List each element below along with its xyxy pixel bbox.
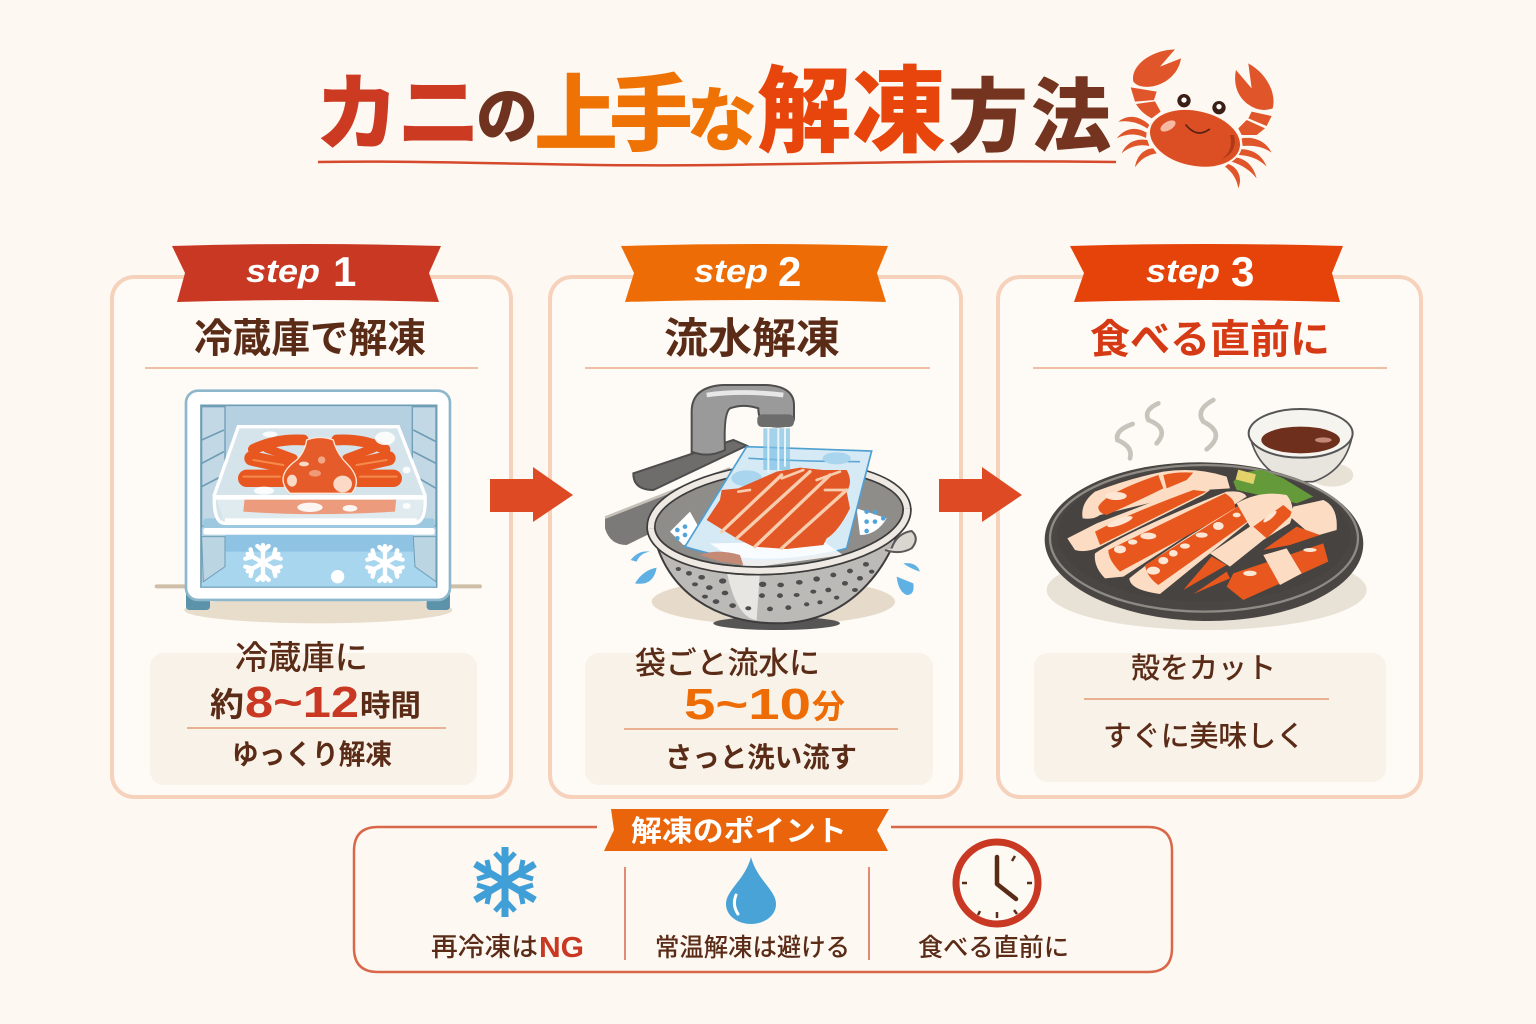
text box: step 1 — [150, 639, 477, 785]
step 1 ribbon: 1 — [333, 248, 356, 295]
step 1 ribbon: step — [246, 253, 320, 289]
heading: step 1: 冷蔵庫で解凍 — [194, 317, 426, 361]
text box: step 1: 時間 — [360, 690, 421, 723]
label: no refreezing: NG — [539, 932, 584, 964]
icon: snowflake — [475, 847, 535, 917]
step 3 ribbon: step — [1146, 253, 1220, 289]
illustration: crab in refrigerator — [157, 391, 480, 623]
panel: step 1 — [112, 244, 511, 797]
title: カニ — [315, 67, 481, 161]
ribbon: points heading — [604, 809, 889, 851]
icon: clock — [956, 842, 1038, 924]
panel: thawing points — [354, 809, 1172, 972]
text box: step 2: 5~10 — [684, 680, 811, 729]
label: no refreezing: 再冷凍は — [431, 932, 538, 962]
title: な — [687, 82, 757, 160]
label: just before eating: 食べる直前に — [918, 934, 1069, 962]
arrow: step 2 to 3 — [939, 467, 1022, 522]
step 3 ribbon: 3 — [1231, 248, 1254, 295]
text box: step 2: さっと洗い流す — [665, 742, 857, 773]
label: no refreezing — [431, 932, 584, 964]
text box: step 2 — [585, 646, 933, 785]
icon: crab mascot — [1117, 49, 1274, 188]
illustration: bag under running water in colander — [605, 385, 920, 630]
title: の — [476, 83, 538, 152]
label: avoid room temperature: 常温解凍は避ける — [655, 934, 850, 962]
text box: step 1: 約 — [210, 686, 244, 723]
illustration: plated crab legs — [1043, 400, 1367, 630]
crab leg pieces — [1067, 470, 1337, 600]
ribbon: points heading: 解凍のポイント — [631, 815, 847, 848]
text box: step 1: 8~12 — [245, 678, 359, 727]
arrow: step 1 to 2 — [490, 467, 573, 522]
text box: step 1: ゆっくり解凍 — [232, 739, 392, 770]
text box: step 2: 分 — [812, 688, 845, 725]
heading: step 2: 流水解凍 — [664, 315, 840, 362]
dipping sauce bowl — [1249, 409, 1353, 482]
text box: step 3: 殻をカット — [1131, 652, 1276, 685]
step 1 ribbon — [172, 244, 441, 302]
step 2 ribbon — [621, 244, 888, 302]
panel: step 3 — [998, 244, 1421, 797]
panel: step 2 — [550, 244, 961, 797]
title: 方法 — [948, 73, 1111, 162]
step 3 ribbon — [1070, 244, 1343, 302]
title: 解凍 — [757, 59, 946, 164]
text box: step 3: すぐに美味しく — [1103, 720, 1305, 753]
text box: step 1: 冷蔵庫に — [235, 639, 368, 676]
title: 上手 — [534, 68, 693, 162]
icon: water drop — [726, 857, 776, 924]
heading: step 3: 食べる直前に — [1090, 318, 1330, 362]
step 2 ribbon: step — [694, 253, 768, 289]
title — [315, 59, 1116, 165]
text box: step 3 — [1034, 652, 1386, 782]
text box: step 2: 袋ごと流水に — [635, 646, 820, 681]
step 2 ribbon: 2 — [778, 248, 801, 295]
